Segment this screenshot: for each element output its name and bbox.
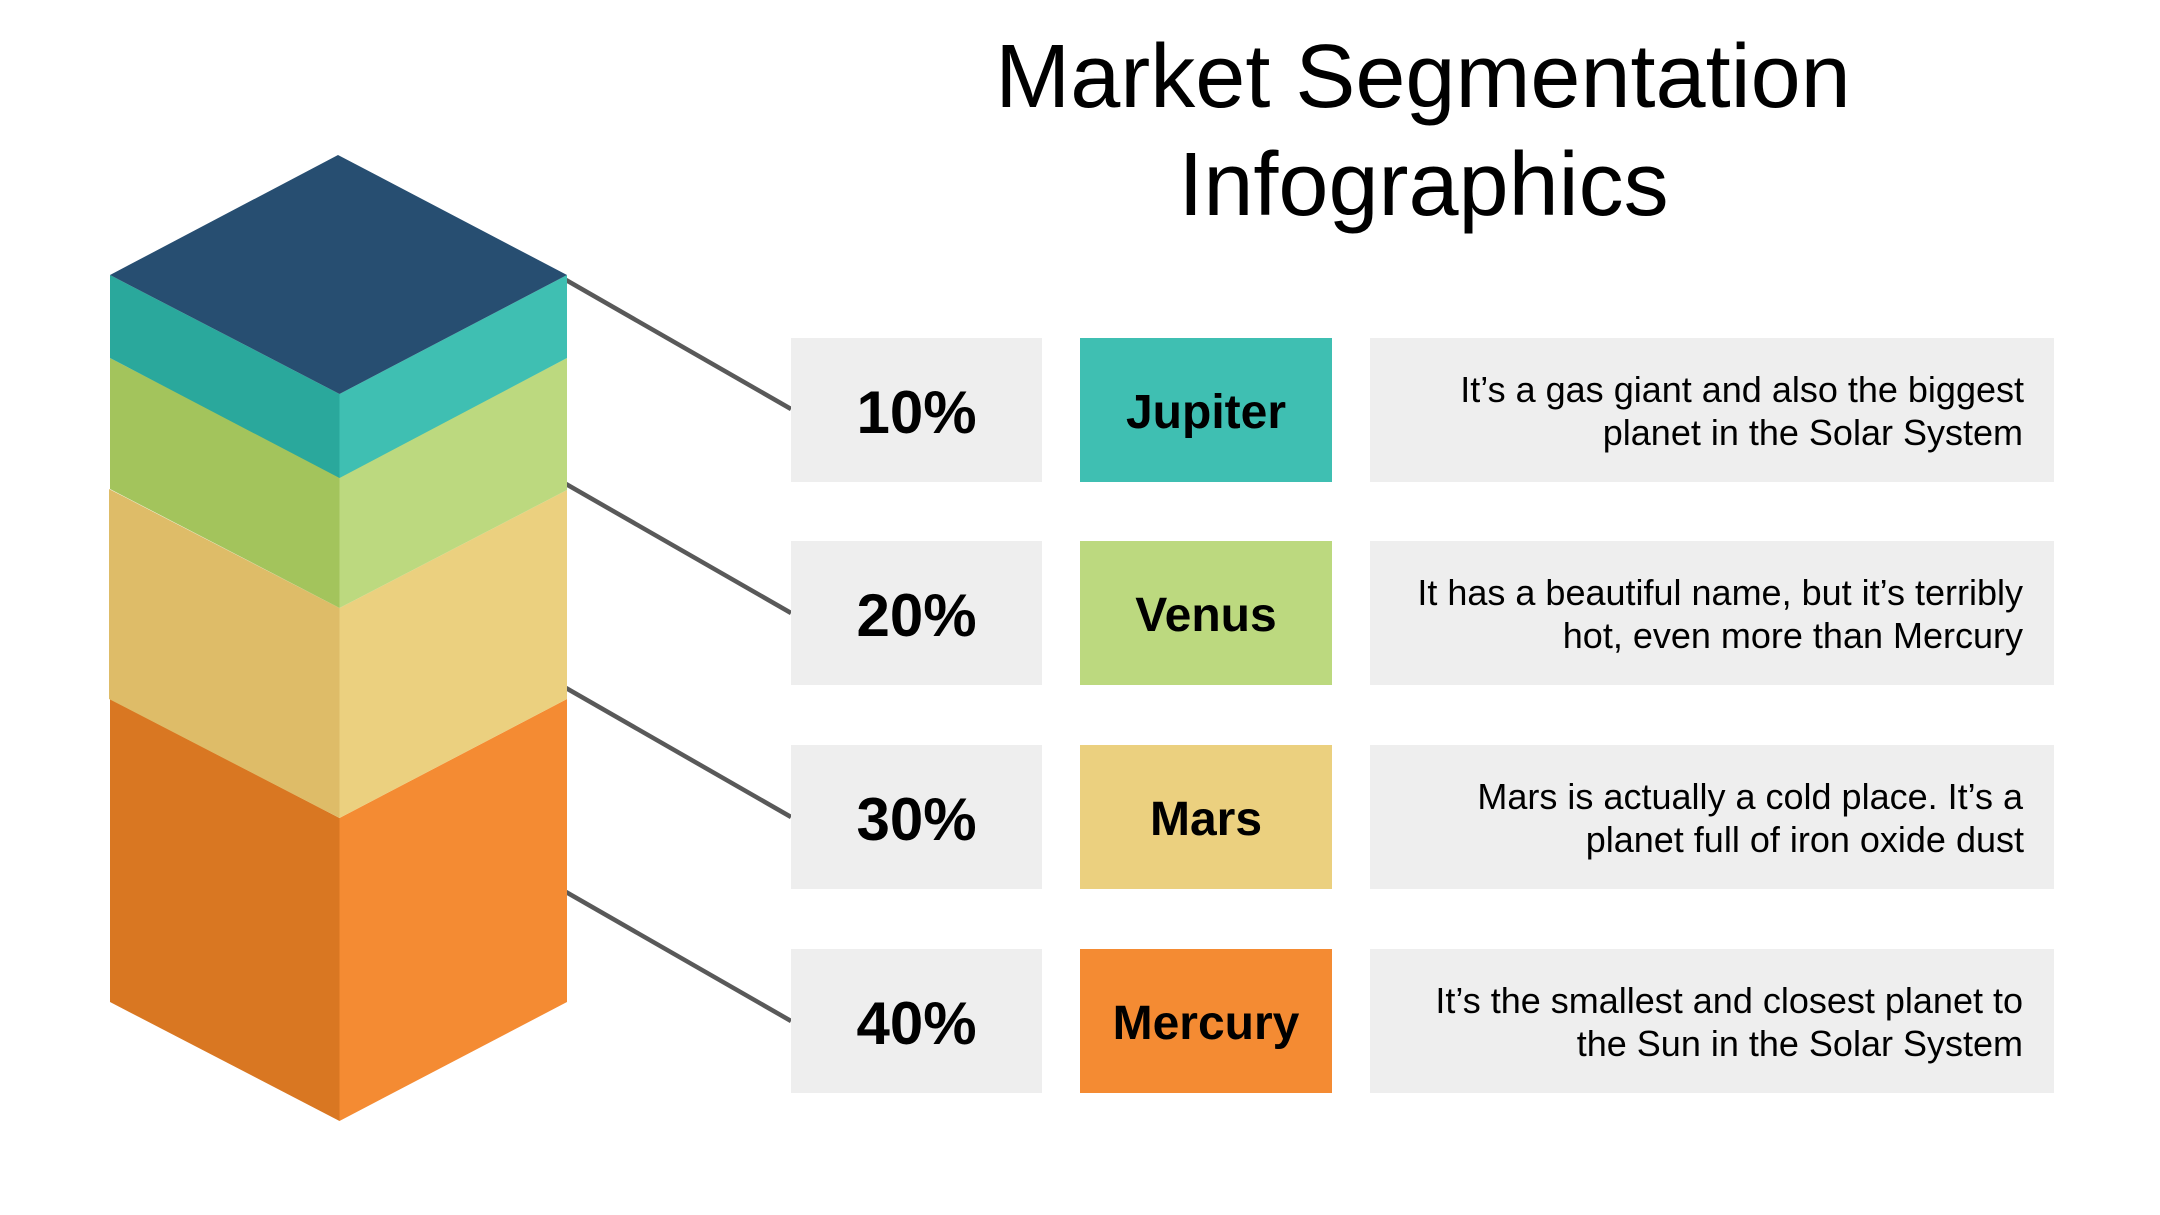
description Venus — [1370, 541, 2054, 685]
row 1: Jupiter — [791, 338, 2054, 482]
description Jupiter: planet in the Solar System — [1603, 412, 2023, 453]
name box Venus — [1080, 541, 1332, 685]
name box Mars: Mars — [1150, 793, 1262, 846]
percent box 40% — [791, 949, 1042, 1093]
description Jupiter: It’s a gas giant and also the biggest — [1460, 369, 2024, 410]
percent box 30%: 30% — [856, 786, 977, 853]
percent box 10% — [791, 338, 1042, 482]
description Jupiter — [1370, 338, 2054, 482]
description Venus: hot, even more than Mercury — [1563, 615, 2023, 656]
layer: Mercury orange — [110, 699, 567, 1121]
name box Mercury: Mercury — [1113, 997, 1300, 1050]
name box Mars — [1080, 745, 1332, 889]
top face navy — [110, 155, 567, 394]
description Venus: It has a beautiful name, but it’s terribly — [1417, 572, 2023, 613]
description Mercury: the Sun in the Solar System — [1577, 1023, 2023, 1064]
title: Infographics — [1178, 135, 1669, 235]
name box Jupiter — [1080, 338, 1332, 482]
description Mars: planet full of iron oxide dust — [1586, 819, 2024, 860]
percent box 20%: 20% — [856, 582, 977, 649]
percent box 10%: 10% — [856, 379, 977, 446]
title — [995, 27, 1851, 235]
row 4: Mercury — [791, 949, 2054, 1093]
name box Mercury — [1080, 949, 1332, 1093]
row 3: Mars — [791, 745, 2054, 889]
layer: Mars yellow — [109, 489, 567, 818]
layer: Venus green — [110, 358, 567, 608]
description Mars — [1370, 745, 2054, 889]
description Mercury — [1370, 949, 2054, 1093]
connector lines — [566, 280, 791, 1021]
isometric stacked column — [109, 155, 567, 1121]
name box Jupiter: Jupiter — [1126, 386, 1286, 439]
description Mars: Mars is actually a cold place. It’s a — [1477, 776, 2024, 817]
percent box 20% — [791, 541, 1042, 685]
name box Venus: Venus — [1135, 589, 1277, 642]
percent box 40%: 40% — [856, 990, 977, 1057]
row 2: Venus — [791, 541, 2054, 685]
description Mercury: It’s the smallest and closest planet to — [1435, 980, 2023, 1021]
layer: Jupiter teal — [110, 275, 567, 478]
percent box 30% — [791, 745, 1042, 889]
title: Market Segmentation — [995, 27, 1851, 127]
